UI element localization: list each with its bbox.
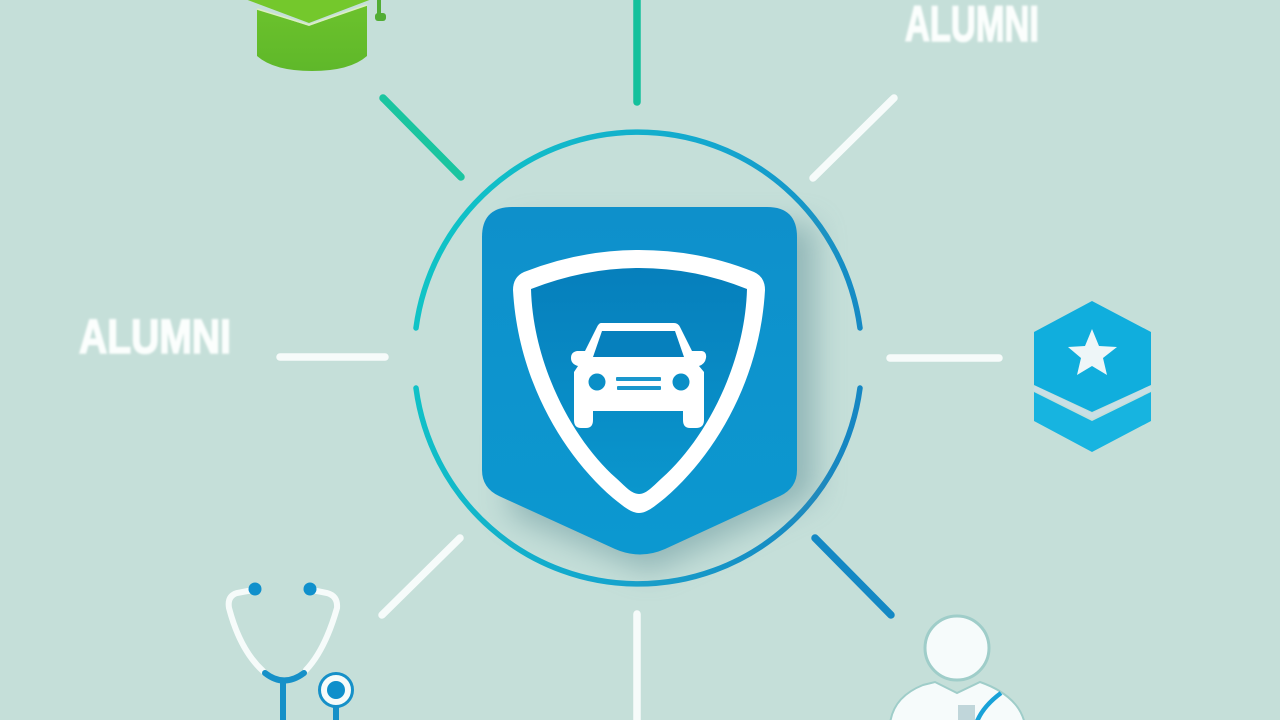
badge shadow: [510, 225, 815, 572]
icon: car: [571, 323, 706, 428]
connector: right: [890, 354, 999, 362]
connector: upper right: [813, 98, 894, 178]
connector: left: [280, 353, 385, 361]
shield: [513, 250, 765, 513]
icon: graduation cap: [245, 0, 386, 71]
central ring: upper arc: [416, 132, 860, 328]
connector: lower right: [815, 538, 891, 615]
badge body: [482, 207, 797, 554]
central badge with shield and car: [482, 207, 797, 554]
label: Alumni, left: ALUMNI: [79, 311, 231, 364]
icon: hexagon star badge: [1034, 301, 1151, 452]
shield inner: [531, 268, 747, 494]
connector: lower left: [382, 538, 460, 615]
icon: person: [890, 616, 1025, 720]
connector: top: [633, 0, 641, 102]
central ring: lower arc: [416, 388, 860, 584]
icon: stethoscope: [229, 582, 352, 720]
connector: bottom: [633, 614, 641, 720]
connector: upper left: [383, 98, 461, 177]
